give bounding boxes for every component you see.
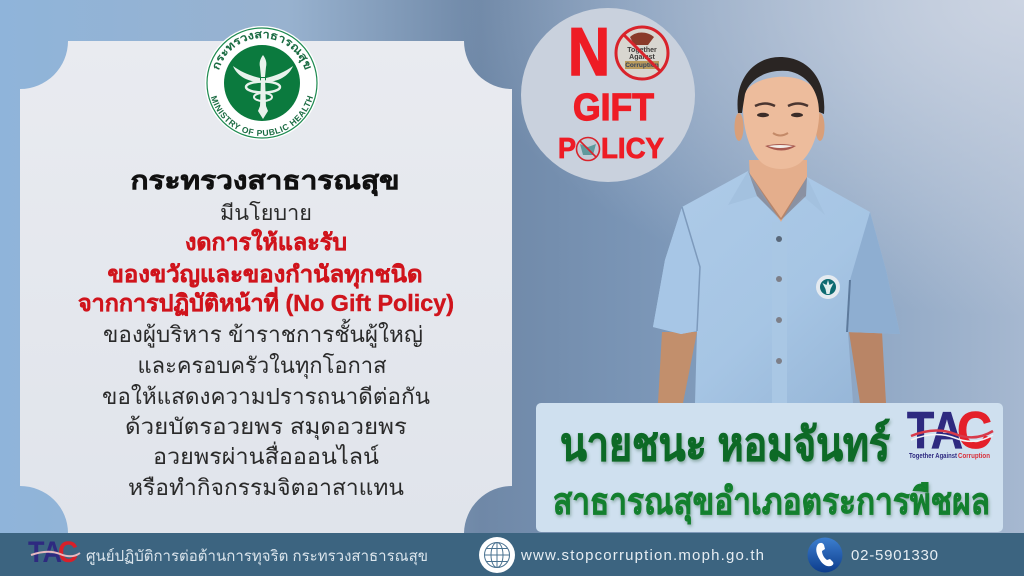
heading: ministry: กระทรวงสาธารณสุข [130, 167, 400, 197]
text: center name: ศูนย์ปฏิบัติการต่อต้านการทุจริต กระทรวงสาธารณสุข [86, 548, 428, 566]
icon: globe [479, 537, 515, 573]
shirt [653, 171, 900, 403]
text: red policy line 2: ของขวัญและของกำนัลทุกชนิด [108, 261, 422, 289]
text: online: อวยพรผ่านสื่อออนไลน์ [153, 441, 379, 469]
panel: official name card [536, 402, 1003, 532]
text: phone number: 02-5901330 [851, 547, 938, 564]
icon: small crossed circle [576, 138, 600, 160]
sleeve shading [653, 207, 700, 334]
logo: TAC: Together Against [909, 453, 958, 460]
icon: crossed circle: Together [627, 47, 657, 54]
collar [728, 171, 825, 222]
logo: TAC: TA [907, 402, 963, 460]
icon: crossed circle: Corruption [625, 62, 659, 69]
arms [658, 332, 697, 403]
shirt emblem [816, 275, 840, 299]
nose [773, 133, 788, 136]
text: red policy line 3: จากการปฏิบัติหน้าที่ (No Gift Policy) [78, 286, 454, 316]
text: red policy line 1: งดการให้และรับ [185, 228, 347, 255]
eyes and brows [755, 104, 808, 117]
neck [749, 160, 807, 222]
placket and buttons [772, 222, 787, 403]
text: official name: นายชนะ หอมจันทร์ [560, 418, 890, 470]
text: has policy: มีนโยบาย [220, 201, 312, 225]
footer bar [0, 533, 1024, 576]
text: NO: N [568, 14, 610, 90]
text: GIFT: GIFT [573, 87, 654, 129]
icon: crossed circle [616, 27, 668, 79]
logo: TAC small: C [58, 536, 78, 569]
text: goodwill: ขอให้แสดงความปรารถนาดีต่อกัน [102, 384, 430, 409]
hair [738, 57, 824, 114]
icon: ministry of public health seal: MINISTRY OF PUBLIC HEALTH [211, 96, 313, 136]
badge: no gift policy [521, 8, 695, 182]
text: and families: และครอบครัวในทุกโอกาส [138, 353, 387, 379]
panel: policy statement [20, 41, 512, 533]
text: volunteer: หรือทำกิจกรรมจิตอาสาแทน [128, 475, 404, 500]
logo: TAC: C [957, 402, 992, 460]
portrait: official in blue shirt [653, 57, 900, 403]
ears [734, 113, 744, 141]
face [743, 77, 819, 169]
mouth [765, 144, 796, 150]
text: LICY: LICY [601, 133, 664, 165]
logo: TAC: Corruption [958, 453, 990, 460]
text: website: www.stopcorruption.moph.go.th [520, 547, 764, 564]
text: cards: ด้วยบัตรอวยพร สมุดอวยพร [125, 414, 407, 440]
text: executives: ของผู้บริหาร ข้าราชการชั้นผู้ใหญ่ [103, 319, 423, 348]
icon: crossed circle: Against [629, 54, 656, 61]
text: POLICY P: P [558, 133, 576, 165]
logo: TAC small: TA [28, 536, 62, 569]
icon: phone [808, 538, 842, 572]
icon: ministry of public health seal [205, 26, 319, 140]
icon: ministry of public health seal: กระทรวงสาธารณสุข [214, 31, 311, 70]
